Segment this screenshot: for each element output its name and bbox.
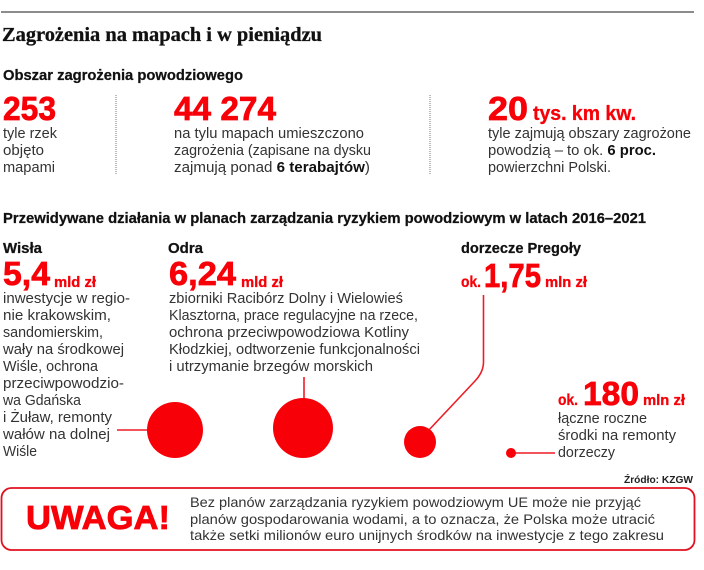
- column: Odra: Klasztorna, prace regulacyjne na rzece,: [169, 308, 418, 324]
- stat: 44 274 maps: zajmują ponad 6 terabajtów ): [174, 160, 370, 176]
- column: Wisła: Wiśle: [3, 444, 37, 460]
- bubble: Wisła: [117, 402, 203, 458]
- callout: warning box: także setki milionów euro unijnych środków na inwestycje z tego zakresu: [190, 527, 664, 543]
- stat: 253 rivers: mapami: [3, 160, 55, 176]
- callout: warning box: planów gospodarowania wodami, a to oznacza, że Polska może utracić: [190, 511, 655, 527]
- column: Pregoła: ok.: [461, 274, 481, 291]
- stat: 253 rivers: objęto: [3, 143, 44, 159]
- column: Odra: Odra: [168, 241, 204, 257]
- heading: flood risk area: Obszar zagrożenia powodziowego: [3, 68, 243, 84]
- column: Wisła: wałów na dolnej: [2, 427, 110, 443]
- column: Wisła: Wiśle, ochrona: [3, 359, 99, 375]
- column: Odra: i utrzymanie brzegów morskich: [169, 359, 373, 375]
- callout: warning box: [2, 488, 694, 550]
- stat: 253 rivers: [3, 90, 58, 176]
- column: Pregoła: [461, 241, 588, 294]
- stat: 44 274 maps: na tylu mapach umieszczono: [174, 126, 364, 142]
- column: Wisła: wa Gdańska: [2, 393, 82, 409]
- column: Odra: zbiorniki Racibórz Dolny i Wielowieś: [169, 291, 403, 307]
- column: Wisła: przeciwpowodzio-: [3, 376, 124, 392]
- bubble: total: [506, 448, 555, 458]
- column: Wisła: i Żuław, remonty: [3, 408, 113, 426]
- column: Odra: 6,24: [169, 255, 237, 292]
- total: yearly repair funds: 180: [583, 375, 639, 412]
- column: Odra: mld zł: [241, 274, 284, 291]
- total: yearly repair funds: ok.: [558, 392, 578, 409]
- column: Wisła: mld zł: [54, 274, 97, 291]
- stat: 44 274 maps: zagrożenia (zapisane na dysku: [174, 143, 371, 159]
- stat: 20 thousand sq km: tyle zajmują obszary zagrożone: [488, 126, 691, 142]
- column: Pregoła: 1,75: [484, 257, 541, 294]
- column: Odra: Kłodzkiej, odtworzenie funkcjonalności: [169, 342, 420, 358]
- column: Pregoła: mln zł: [545, 274, 588, 291]
- bubble: Pregoła: [404, 295, 484, 458]
- total: yearly repair funds: dorzeczy: [558, 445, 616, 461]
- callout: warning box: Bez planów zarządzania ryzykiem powodziowym UE może nie przyjąć: [190, 494, 641, 510]
- column: Odra: ochrona przeciwpowodziowa Kotliny: [169, 325, 410, 341]
- column: Wisła: wały na środkowej: [2, 342, 124, 358]
- column: Wisła: inwestycje w regio-: [3, 291, 130, 307]
- column: Wisła: 5,4: [3, 255, 51, 292]
- column: Wisła: [2, 241, 130, 460]
- stat: 44 274 maps: [174, 90, 371, 176]
- total: yearly repair funds: łączne roczne: [558, 411, 647, 427]
- stat: 20 thousand sq km: 20: [488, 90, 528, 127]
- total: yearly repair funds: środki na remonty: [558, 428, 677, 444]
- bubble: Odra: [273, 377, 333, 458]
- stat: 20 thousand sq km: powierzchni Polski.: [488, 160, 611, 176]
- source: Źródło: KZGW: [624, 473, 693, 486]
- column: Wisła: nie krakowskim,: [3, 308, 111, 324]
- stat: 253 rivers: tyle rzek: [3, 126, 58, 142]
- stat: 20 thousand sq km: tys. km kw.: [533, 103, 636, 125]
- callout: warning box: UWAGA!: [26, 499, 170, 536]
- total: yearly repair funds: [558, 375, 686, 461]
- title: Zagrożenia na mapach i w pieniądzu: [2, 25, 322, 46]
- stat: 20 thousand sq km: powodzią – to ok. 6 proc.: [488, 143, 656, 159]
- column: Wisła: sandomierskim,: [3, 325, 103, 341]
- stat: 253 rivers: 253: [3, 90, 56, 127]
- total: yearly repair funds: mln zł: [643, 392, 686, 409]
- stat: 20 thousand sq km: [488, 90, 691, 176]
- column: Wisła: Wisła: [3, 241, 43, 257]
- column: Pregoła: dorzecze Pregoły: [461, 241, 581, 257]
- column: Odra: [168, 241, 420, 375]
- heading: planned actions: Przewidywane działania w planach zarządzania ryzykiem powodziowym w latach 2016–2021: [3, 211, 646, 227]
- stat: 44 274 maps: 44 274: [174, 90, 277, 127]
